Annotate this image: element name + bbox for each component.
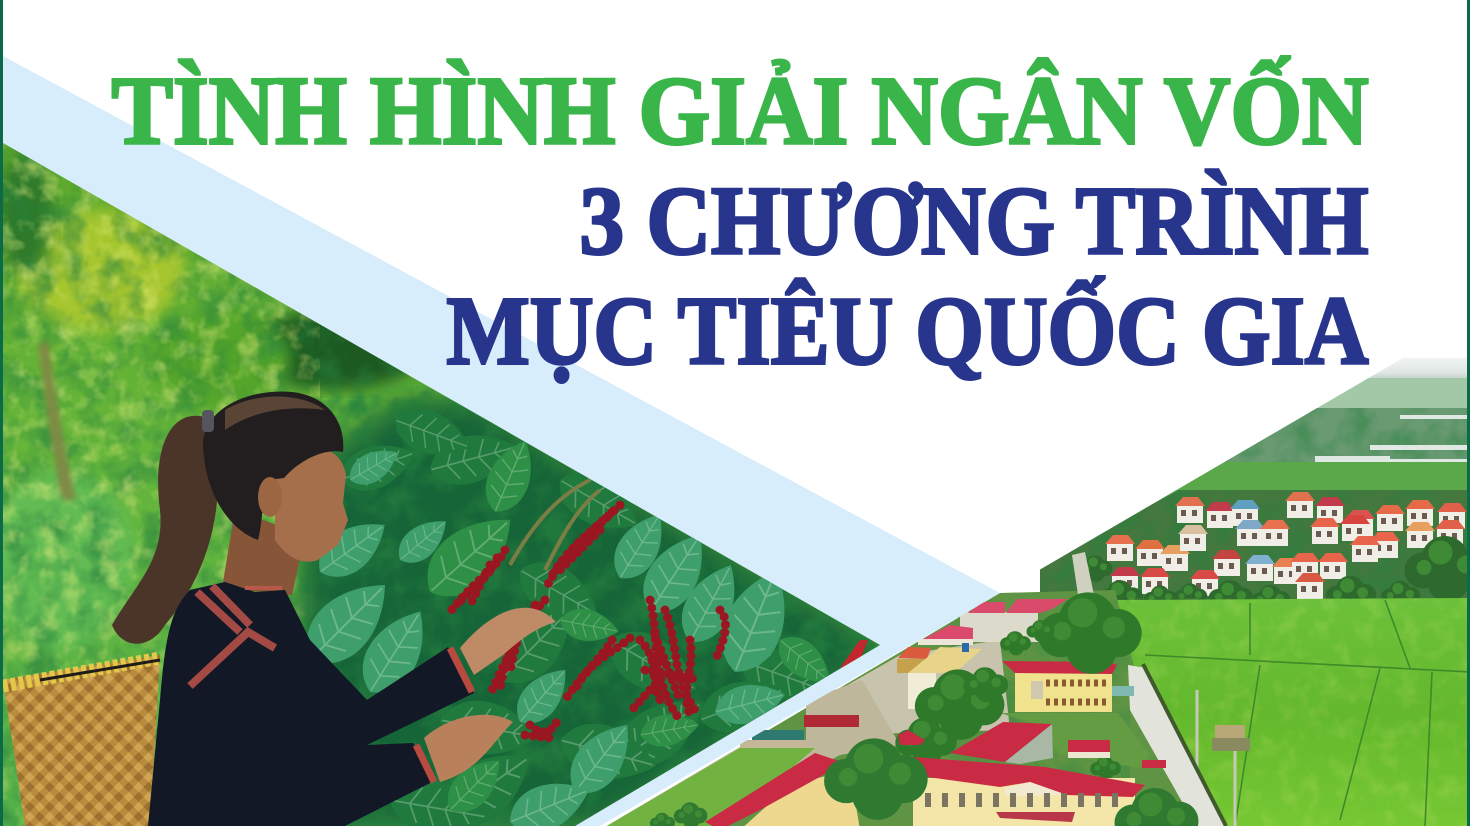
woman [112,391,556,826]
left lawn [600,748,815,826]
foliage background [0,140,900,826]
upper hand [460,608,556,675]
compound trees [895,592,1142,780]
hair tie [202,410,214,432]
tree line [1087,536,1467,600]
rice fields [1110,598,1470,826]
school compound ground [600,590,1225,826]
foreground trees [650,738,1198,826]
title line 1: TÌNH HÌNH GIẢI NGÂN VỐN [112,56,1368,164]
berry stems [510,480,600,570]
black shirt [148,582,474,826]
sleeve cuffs [450,648,472,692]
field hut [1215,725,1245,739]
cream building [908,643,982,709]
title [112,56,1368,384]
lawn patch [1002,713,1130,766]
photo: woman harvesting coffee berries [0,140,900,826]
ear [258,477,282,517]
left green edge [0,0,3,826]
lower hand [424,715,513,782]
red object at tip [840,640,868,668]
woven basket [3,655,160,826]
upper green field [1150,462,1470,502]
title line 2: 3 CHƯƠNG TRÌNH [580,168,1368,274]
village houses [1105,492,1467,599]
diagonal light blue band [3,56,1000,826]
yellow building [1002,661,1134,712]
title line 3: MỤC TIÊU QUỐC GIA [446,276,1368,384]
coffee plant leaves [290,390,900,826]
coffee berries [450,505,725,738]
road [1128,665,1228,826]
back pink-roof building [897,599,1068,673]
plaza and bus zone [846,642,1010,734]
neck [223,520,300,595]
photo: rural village and rice fields [600,355,1470,826]
shirt embroidery [190,586,275,686]
ponytail [112,416,218,644]
front main building [898,722,1166,826]
hair [203,391,343,540]
right green edge [1467,0,1470,826]
left red roof building [705,753,860,826]
ponds [1315,415,1470,465]
face [275,448,348,562]
village backdrop [1040,490,1470,610]
sky haze and far fields [1366,358,1467,380]
